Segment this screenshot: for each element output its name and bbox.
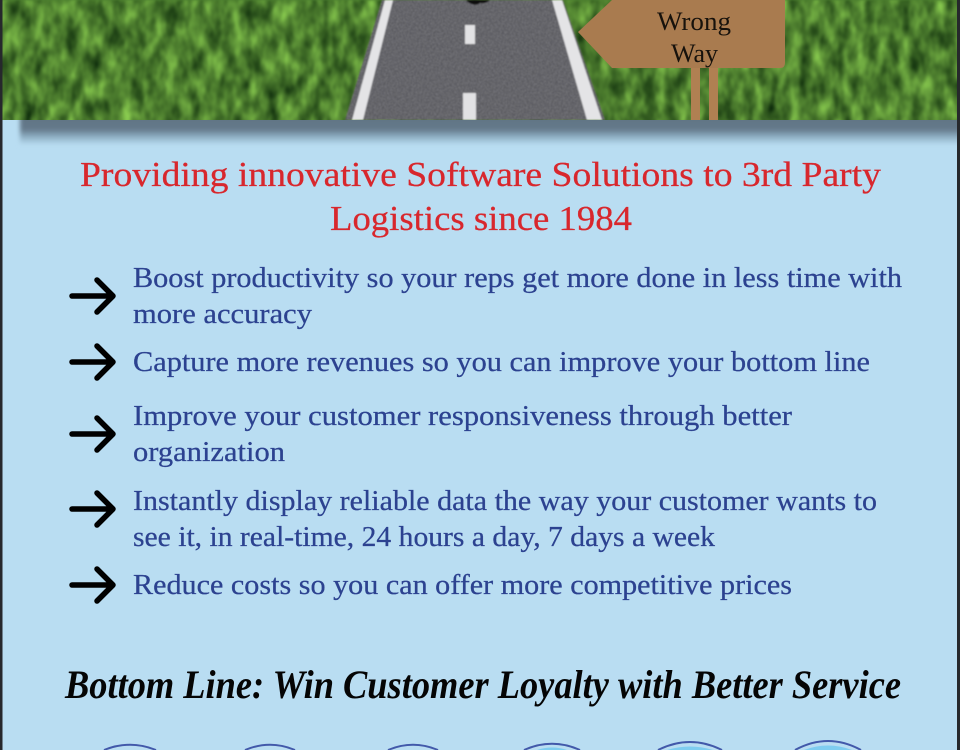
circle 6 top arc (795, 741, 861, 750)
circle 5 top arc (658, 742, 722, 750)
benefit 4 (72, 485, 877, 553)
wrong way sign: Way (671, 39, 718, 68)
benefit 1 (72, 262, 903, 330)
benefit 3: Improve your customer responsiveness through better (133, 400, 792, 432)
arrow icon (72, 493, 113, 525)
benefit 3: organization (133, 436, 286, 468)
benefit list (72, 262, 903, 601)
benefit 2: Capture more revenues so you can improve your bottom line (133, 346, 870, 378)
centre dash lower (463, 93, 476, 120)
heading (80, 155, 882, 238)
benefit 4: see it, in real-time, 24 hours a day, 7 days a week (133, 521, 715, 553)
bottom line slogan: Bottom Line: Win Customer Loyalty with Better Service (64, 662, 901, 707)
benefit 3 (72, 400, 792, 468)
left page edge (0, 0, 2, 750)
right road line (552, 0, 602, 120)
circle 2 top arc (245, 745, 295, 750)
circle 4 top arc (524, 744, 580, 750)
row of circles, cropped by the bottom edge (104, 741, 861, 750)
centre dash upper (465, 25, 475, 44)
sign text: Wrong (657, 7, 731, 36)
arrow icon (72, 569, 113, 601)
hero: grass and road (0, 0, 960, 124)
black mark at top of road (466, 0, 490, 5)
road (340, 0, 610, 120)
benefit 4: Instantly display reliable data the way your customer wants to (133, 485, 877, 517)
circle 3 top arc (388, 745, 438, 750)
benefit 1: Boost productivity so your reps get more done in less time with (133, 262, 903, 294)
heading: Providing innovative Software Solutions to 3rd Party (80, 155, 882, 194)
left road line (352, 0, 393, 120)
right page edge (957, 0, 960, 750)
arrow icon (72, 280, 113, 312)
circle 1 top arc (104, 745, 156, 750)
grass field (0, 0, 960, 124)
heading: Logistics since 1984 (330, 199, 632, 238)
benefit 5: Reduce costs so you can offer more competitive prices (133, 569, 792, 601)
shadow under hero (20, 110, 960, 145)
sign posts (691, 66, 700, 120)
arrow icon (72, 346, 113, 378)
benefit 1: more accuracy (133, 298, 313, 330)
wrong way sign (578, 0, 785, 120)
arrow icon (72, 418, 113, 450)
sign board (578, 0, 785, 68)
